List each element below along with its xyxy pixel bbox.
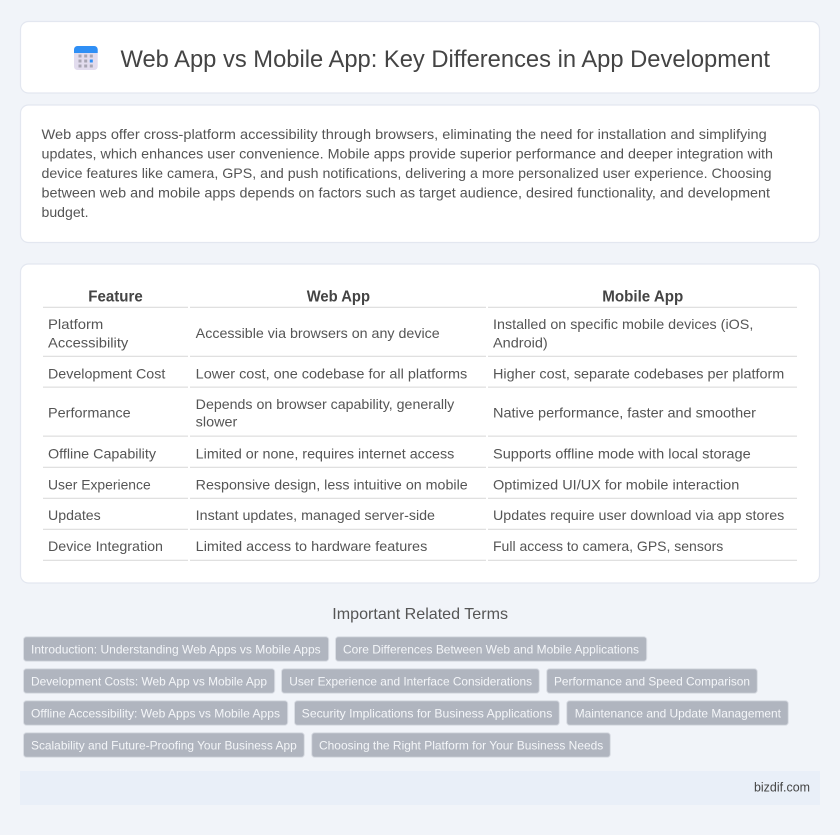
text block: introduction paragraph: between web and mobile apps depends on factors such as target audience, desired functionality, and development [42, 185, 770, 201]
row: performance: Performance [48, 405, 131, 421]
table header row [88, 289, 684, 306]
tag: choosing platform [312, 733, 610, 757]
row: development cost: Higher cost, separate codebases per platform [493, 365, 784, 381]
tag: scalability [24, 733, 304, 757]
panel: header [20, 22, 820, 93]
tag: security: Security Implications for Business Applications [302, 706, 552, 720]
heading: important related terms: Important Related Terms [332, 606, 508, 623]
table header row: Web App [307, 289, 370, 306]
icon: app grid [74, 46, 98, 70]
row: updates: Updates [48, 507, 101, 523]
tag: scalability: Scalability and Future-Proofing Your Business App [31, 738, 297, 752]
row: user experience: Responsive design, less intuitive on mobile [196, 476, 468, 492]
row: device integration: Device Integration [48, 538, 163, 554]
tag: performance: Performance and Speed Comparison [554, 674, 750, 688]
row: user experience: User Experience [48, 476, 151, 492]
row: user experience [48, 476, 739, 492]
tag: offline accessibility: Offline Accessibility: Web Apps vs Mobile Apps [31, 706, 280, 720]
row: offline capability: Offline Capability [48, 445, 156, 461]
row: platform accessibility: Platform [48, 316, 103, 332]
footer [20, 771, 820, 805]
text block: introduction paragraph: device features like camera, GPS, and push notifications, delivering a more personalized user experience. Choosing [42, 165, 772, 181]
row: performance: Native performance, faster and smoother [493, 405, 756, 421]
tag: introduction [24, 637, 329, 661]
tag: maintenance [567, 701, 788, 725]
row: device integration: Full access to camera, GPS, sensors [493, 538, 723, 554]
text block: introduction paragraph: updates, which enhances user convenience. Mobile apps provide superior performance and deeper integration with [42, 146, 773, 162]
text block: introduction paragraph: budget. [42, 204, 88, 220]
tag: offline accessibility [24, 701, 288, 725]
table header row: Feature [88, 289, 143, 306]
row: platform accessibility: Accessibility [48, 334, 128, 350]
tags: related terms [24, 637, 788, 757]
tag: user experience: User Experience and Interface Considerations [289, 674, 532, 688]
tag: development costs [24, 669, 275, 693]
tag: user experience [282, 669, 539, 693]
row: performance: Depends on browser capability, generally [196, 396, 454, 412]
row: platform accessibility: Accessible via browsers on any device [196, 325, 440, 341]
title: Web App vs Mobile App: Key Differences in App Development [120, 46, 770, 73]
row: performance: slower [196, 414, 238, 430]
row: platform accessibility: Android) [493, 334, 548, 350]
row: updates: Updates require user download via app stores [493, 507, 784, 523]
tag: maintenance: Maintenance and Update Management [575, 706, 782, 720]
tag: introduction: Introduction: Understanding Web Apps vs Mobile Apps [31, 642, 321, 656]
row: platform accessibility [48, 316, 753, 350]
row: offline capability: Limited or none, requires internet access [196, 445, 454, 461]
text block: introduction paragraph: Web apps offer cross-platform accessibility through browsers, eliminating the need for installation and simplifying [42, 126, 767, 142]
row: development cost: Development Cost [48, 365, 165, 381]
row: updates [48, 507, 784, 523]
footer source text: bizdif.com [754, 781, 810, 795]
row: performance [48, 396, 756, 430]
panel: comparison table [20, 264, 820, 583]
row: updates: Instant updates, managed server-side [196, 507, 435, 523]
row: offline capability [48, 445, 751, 461]
tag: performance [547, 669, 757, 693]
row: user experience: Optimized UI/UX for mobile interaction [493, 476, 739, 492]
row: offline capability: Supports offline mode with local storage [493, 445, 751, 461]
tag: core differences [336, 637, 647, 661]
tag: development costs: Development Costs: Web App vs Mobile App [31, 674, 267, 688]
tag: core differences: Core Differences Between Web and Mobile Applications [343, 642, 639, 656]
tag: security [294, 701, 559, 725]
row: platform accessibility: Installed on specific mobile devices (iOS, [493, 316, 753, 332]
tag: choosing platform: Choosing the Right Platform for Your Business Needs [319, 738, 603, 752]
row: development cost: Lower cost, one codebase for all platforms [196, 365, 467, 381]
text block: introduction paragraph [42, 126, 773, 220]
panel: introduction [20, 105, 820, 242]
row: device integration: Limited access to hardware features [196, 538, 427, 554]
row: development cost [48, 365, 784, 381]
table header row: Mobile App [602, 289, 684, 306]
row: device integration [48, 538, 723, 554]
